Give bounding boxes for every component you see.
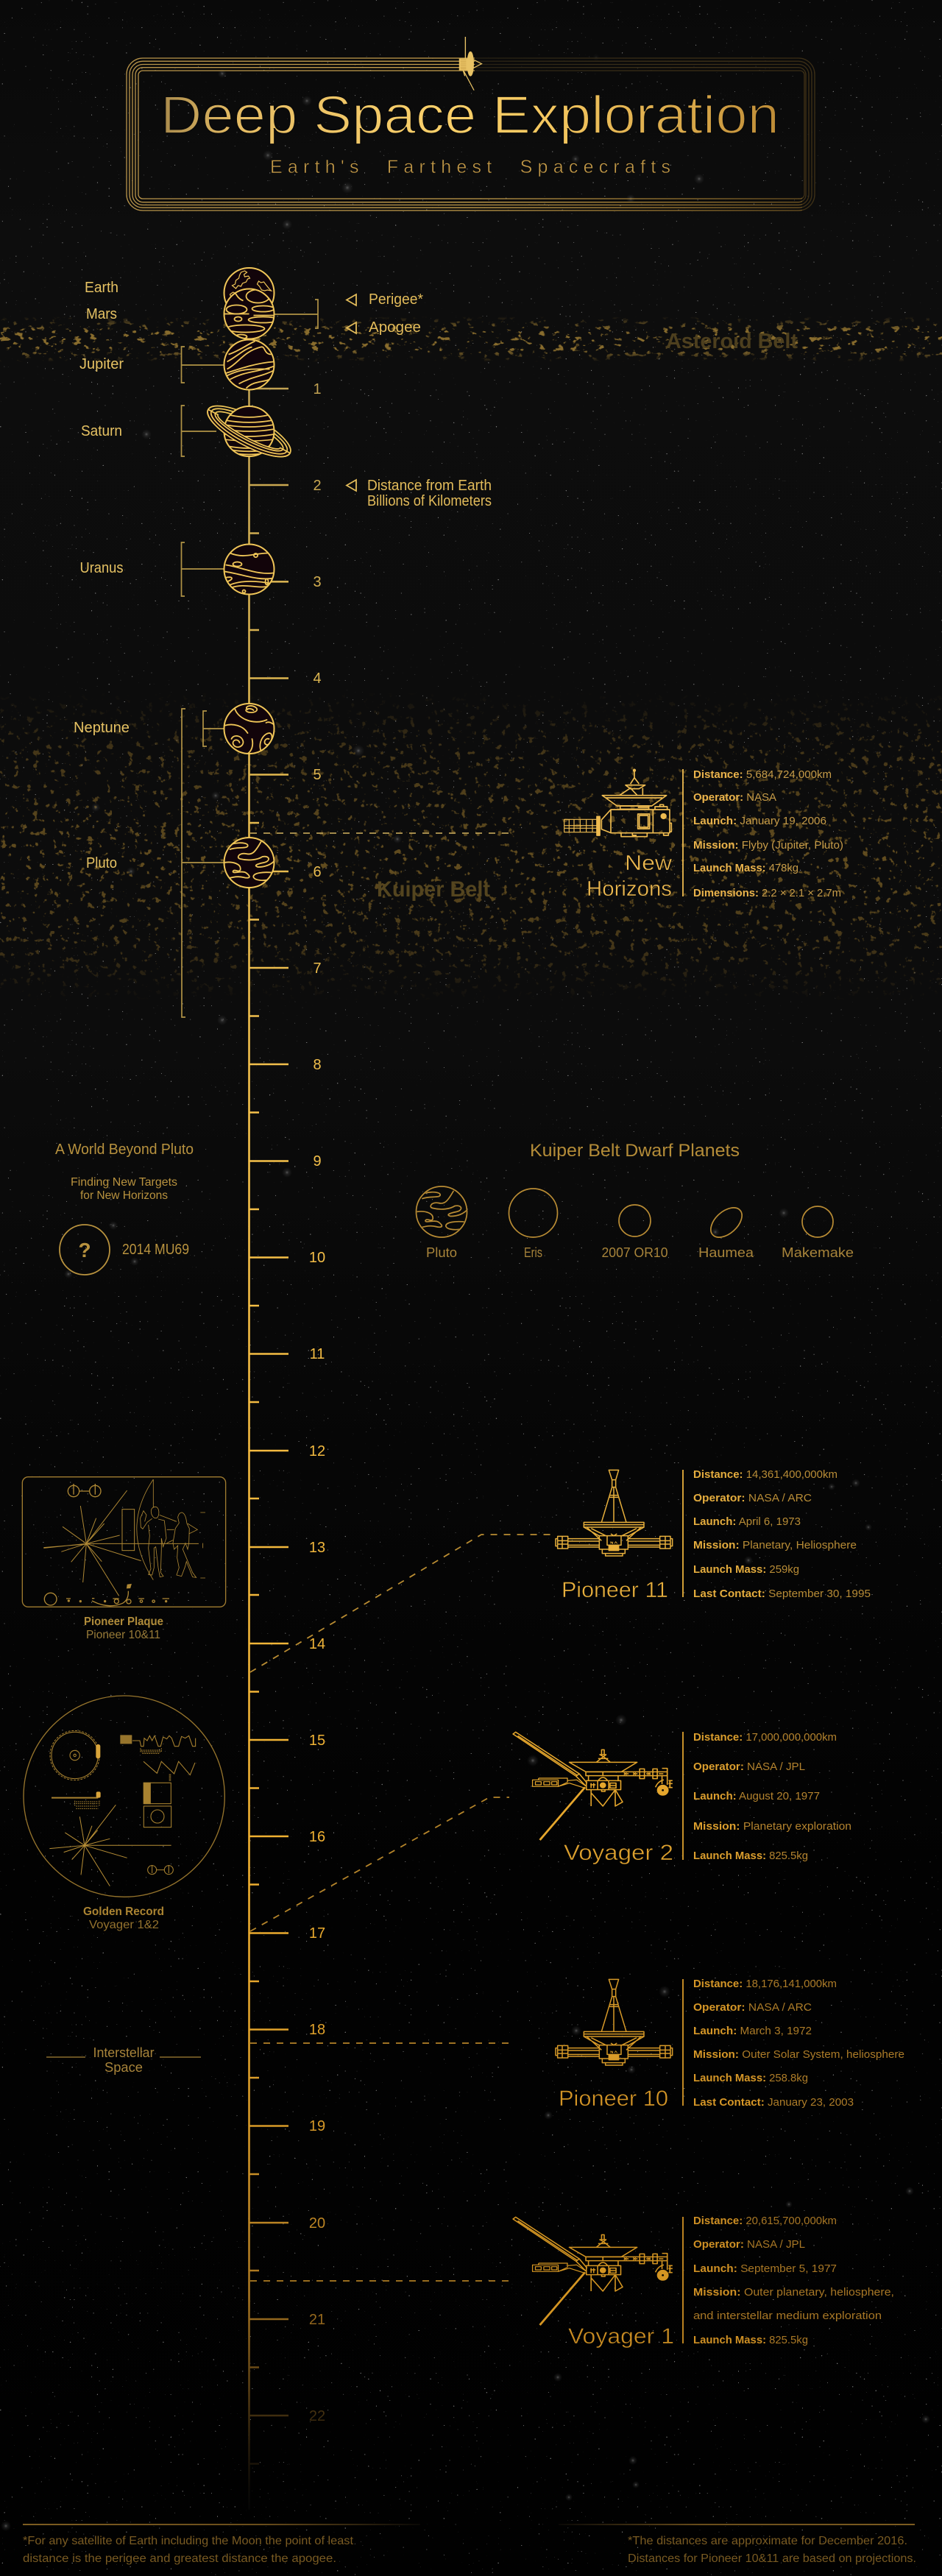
axis numbers: 20	[309, 2215, 325, 2232]
footnote left	[23, 2535, 354, 2565]
Voyager 1 facts: and interstellar medium exploration	[693, 2310, 882, 2322]
New Horizons facts: Distance: 5,684,724,000km	[693, 768, 832, 781]
New Horizons facts: Launch: January 19, 2006	[693, 815, 826, 827]
Voyager 1 facts	[683, 2215, 894, 2346]
Voyager 2 spacecraft	[513, 1732, 673, 1840]
icon: title spacecraft	[460, 37, 481, 91]
axis numbers: 3	[313, 574, 322, 590]
planet: Jupiter	[224, 340, 274, 390]
Voyager 2 facts: Distance: 17,000,000,000km	[693, 1731, 837, 1744]
Voyager 2 facts: Launch Mass: 825.5kg	[693, 1850, 808, 1862]
Pioneer 11 facts: Launch Mass: 259kg	[693, 1563, 799, 1576]
New Horizons facts: Launch Mass: 478kg	[693, 862, 798, 874]
panel: a world beyond Pluto	[55, 1142, 194, 1275]
planet: Pluto	[224, 838, 274, 888]
planet names: Jupiter	[79, 356, 124, 372]
Pioneer 11 facts: Launch: April 6, 1973	[693, 1515, 801, 1528]
footer rules	[23, 2524, 915, 2525]
footnote left: distance is the perigee and greatest distance the apogee.	[23, 2552, 336, 2565]
Voyager 1 facts: Mission: Outer planetary, heliosphere,	[693, 2286, 894, 2299]
New Horizons name	[587, 852, 673, 901]
Voyager 1 facts: Distance: 20,615,700,000km	[693, 2215, 837, 2227]
axis numbers: 4	[313, 670, 322, 687]
planet names: Neptune	[74, 720, 130, 736]
axis numbers	[309, 381, 325, 2424]
asteroid belt label: Asteroid Belt	[666, 330, 798, 353]
interstellar space label: Space	[105, 2060, 143, 2075]
axis numbers: 1	[313, 381, 322, 397]
Pioneer 11 name: Pioneer 11	[562, 1578, 668, 1602]
legend: distance scale	[347, 478, 492, 509]
New Horizons name: New	[625, 852, 673, 875]
axis numbers: 13	[309, 1540, 325, 1556]
New Horizons spacecraft	[564, 769, 671, 837]
footnote right: *The distances are approximate for December 2016.	[628, 2535, 907, 2547]
planet: Saturn	[207, 405, 291, 458]
golden record caption: Voyager 1&2	[89, 1919, 159, 1931]
planet: Earth	[224, 267, 275, 303]
Voyager 2 facts	[683, 1731, 851, 1862]
axis numbers: 14	[309, 1636, 325, 1652]
Voyager 2 name: Voyager 2	[564, 1841, 673, 1865]
axis numbers: 11	[310, 1346, 325, 1362]
axis numbers: 21	[309, 2312, 325, 2328]
Voyager 1 facts: Launch Mass: 825.5kg	[693, 2334, 808, 2346]
axis numbers: 15	[309, 1733, 325, 1749]
kuiper belt label: Kuiper Belt	[377, 877, 490, 902]
plaque caption: Pioneer Plaque	[84, 1616, 163, 1628]
Pioneer 11 facts: Distance: 14,361,400,000km	[693, 1468, 837, 1481]
plaque caption: Pioneer 10&11	[86, 1629, 160, 1641]
Pioneer 11 facts: Mission: Planetary, Heliosphere	[693, 1539, 857, 1551]
panel: Kuiper Belt dwarf planets: Pluto	[426, 1245, 457, 1260]
legend: perigee and apogee: Perigee*	[369, 291, 423, 308]
axis numbers: 5	[313, 767, 322, 783]
kuiper belt speckles	[0, 692, 942, 1001]
panel: a world beyond Pluto: 2014 MU69	[122, 1242, 189, 1258]
Voyager 1 facts: Launch: September 5, 1977	[693, 2262, 837, 2275]
Pioneer 11 facts: Last Contact: September 30, 1995	[693, 1588, 871, 1600]
axis numbers: 19	[309, 2118, 325, 2134]
footnote right	[628, 2535, 916, 2565]
New Horizons facts: Operator: NASA	[693, 791, 776, 804]
New Horizons name: Horizons	[587, 877, 672, 901]
legend: distance scale: Distance from Earth	[367, 478, 492, 494]
panel: Kuiper Belt dwarf planets: 2007 OR10	[602, 1245, 668, 1260]
interstellar space label	[46, 2045, 201, 2075]
distance axis	[249, 368, 288, 2510]
axis numbers: 16	[309, 1829, 325, 1845]
Voyager 1 facts: Operator: NASA / JPL	[693, 2238, 805, 2251]
axis numbers: 17	[309, 1925, 325, 1942]
Pioneer 10 facts: Distance: 18,176,141,000km	[693, 1978, 837, 1990]
Voyager 2 facts: Mission: Planetary exploration	[693, 1820, 851, 1833]
axis numbers: 2	[313, 478, 322, 494]
panel: Pioneer plaque	[22, 1477, 226, 1607]
title frame	[127, 54, 818, 212]
legend: distance scale: Billions of Kilometers	[367, 493, 492, 509]
axis numbers: 18	[309, 2022, 325, 2038]
Voyager 1 name: Voyager 1	[568, 2324, 674, 2349]
panel: Kuiper Belt dwarf planets: Eris	[524, 1245, 542, 1260]
Pioneer 10 name: Pioneer 10	[559, 2087, 668, 2111]
New Horizons facts	[683, 768, 843, 899]
legend: perigee and apogee	[347, 291, 423, 336]
axis numbers: 7	[313, 960, 322, 977]
planet: Neptune	[224, 704, 274, 754]
golden record caption: Golden Record	[83, 1906, 164, 1918]
planet names	[74, 280, 130, 871]
Pioneer 10 spacecraft	[556, 1979, 673, 2065]
Pioneer 10 facts: Launch Mass: 258.8kg	[693, 2072, 808, 2084]
panel: golden record	[24, 1696, 224, 1897]
dashed distance markers	[250, 833, 550, 2281]
panel: Kuiper Belt dwarf planets: Makemake	[782, 1245, 854, 1260]
subtitle: Earth's Farthest Spacecrafts	[270, 157, 670, 177]
planet names: Uranus	[79, 560, 124, 576]
footnote left: *For any satellite of Earth including the Moon the point of least	[23, 2535, 354, 2547]
planet: Mars	[224, 289, 278, 339]
planet names: Pluto	[86, 855, 117, 871]
Pioneer 10 facts: Mission: Outer Solar System, heliosphere	[693, 2048, 904, 2061]
brackets	[181, 300, 318, 1017]
planet names: Saturn	[81, 423, 122, 439]
Voyager 2 facts: Operator: NASA / JPL	[693, 1761, 805, 1773]
panel: a world beyond Pluto: for New Horizons	[80, 1189, 168, 1202]
axis numbers: 22	[309, 2408, 325, 2424]
title: Deep Space Exploration	[160, 86, 779, 145]
Pioneer 10 facts: Operator: NASA / ARC	[693, 2001, 812, 2014]
planet: Uranus	[224, 545, 274, 595]
footnote right: Distances for Pioneer 10&11 are based on projections.	[628, 2552, 916, 2565]
panel: Kuiper Belt dwarf planets: Haumea	[698, 1245, 754, 1260]
Pioneer 11 spacecraft	[556, 1470, 673, 1556]
golden record caption	[83, 1906, 164, 1931]
planet names: Mars	[86, 306, 117, 322]
axis numbers: 12	[309, 1443, 325, 1459]
interstellar space label: Interstellar	[93, 2045, 155, 2060]
panel: a world beyond Pluto: A World Beyond Pluto	[55, 1142, 194, 1158]
panel: Kuiper Belt dwarf planets	[417, 1141, 854, 1260]
legend: perigee and apogee: Apogee	[369, 319, 421, 336]
planet names: Earth	[85, 280, 118, 296]
panel: a world beyond Pluto: Finding New Targets	[71, 1176, 177, 1189]
New Horizons facts: Mission: Flyby (Jupiter, Pluto)	[693, 839, 843, 852]
panel: Kuiper Belt dwarf planets: Kuiper Belt Dwarf Planets	[530, 1141, 740, 1161]
plaque caption	[84, 1616, 163, 1641]
axis numbers: 9	[313, 1153, 322, 1170]
Pioneer 10 facts	[683, 1978, 904, 2109]
Pioneer 11 facts	[683, 1468, 871, 1600]
axis numbers: 10	[309, 1250, 325, 1266]
Pioneer 10 facts: Launch: March 3, 1972	[693, 2025, 812, 2037]
New Horizons facts: Dimensions: 2.2 × 2.1 × 2.7m	[693, 887, 841, 899]
Voyager 1 spacecraft	[513, 2217, 673, 2325]
Pioneer 10 facts: Last Contact: January 23, 2003	[693, 2096, 854, 2109]
asteroid belt speckles	[0, 316, 942, 362]
axis numbers: 6	[313, 864, 322, 880]
axis numbers: 8	[313, 1057, 322, 1073]
Voyager 2 facts: Launch: August 20, 1977	[693, 1790, 820, 1802]
Pioneer 11 facts: Operator: NASA / ARC	[693, 1492, 812, 1504]
panel: a world beyond Pluto: ?	[78, 1239, 91, 1262]
